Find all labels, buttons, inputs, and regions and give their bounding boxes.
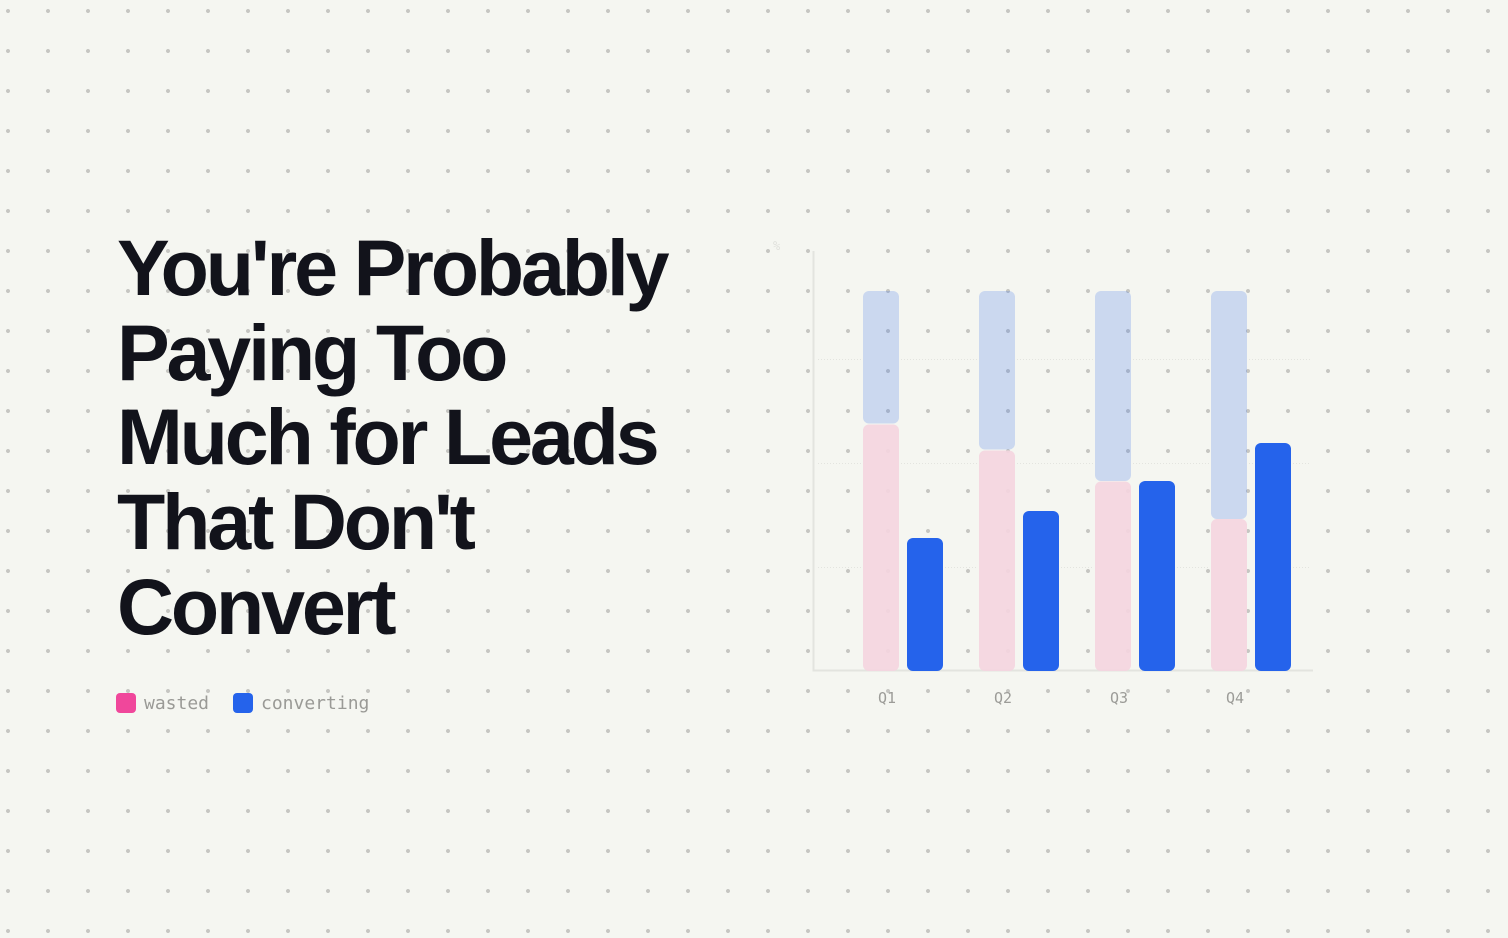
title xyxy=(117,223,670,651)
legend swatch: converting xyxy=(233,693,253,713)
legend label: converting: converting xyxy=(261,693,369,714)
title: You're Probably xyxy=(117,223,666,312)
axis unit label: % xyxy=(773,239,781,253)
title: Convert xyxy=(117,562,393,651)
title: Paying Too xyxy=(117,308,505,397)
Q2 bars xyxy=(979,291,1059,671)
chart axes xyxy=(814,251,1313,670)
legend xyxy=(116,693,369,714)
quarter labels: Q4 xyxy=(1226,689,1244,707)
quarter labels: Q1 xyxy=(878,689,896,707)
quarter labels: Q3 xyxy=(1110,689,1128,707)
title: That Don't xyxy=(117,477,473,566)
legend label: wasted: wasted xyxy=(144,693,209,714)
quarter labels: Q2 xyxy=(994,689,1012,707)
Q3 bars xyxy=(1095,291,1175,671)
quarter labels xyxy=(878,689,1244,707)
Q1 bars xyxy=(863,291,943,671)
Q4 bars xyxy=(1211,291,1291,671)
legend swatch: wasted xyxy=(116,693,136,713)
title: Much for Leads xyxy=(117,392,657,481)
